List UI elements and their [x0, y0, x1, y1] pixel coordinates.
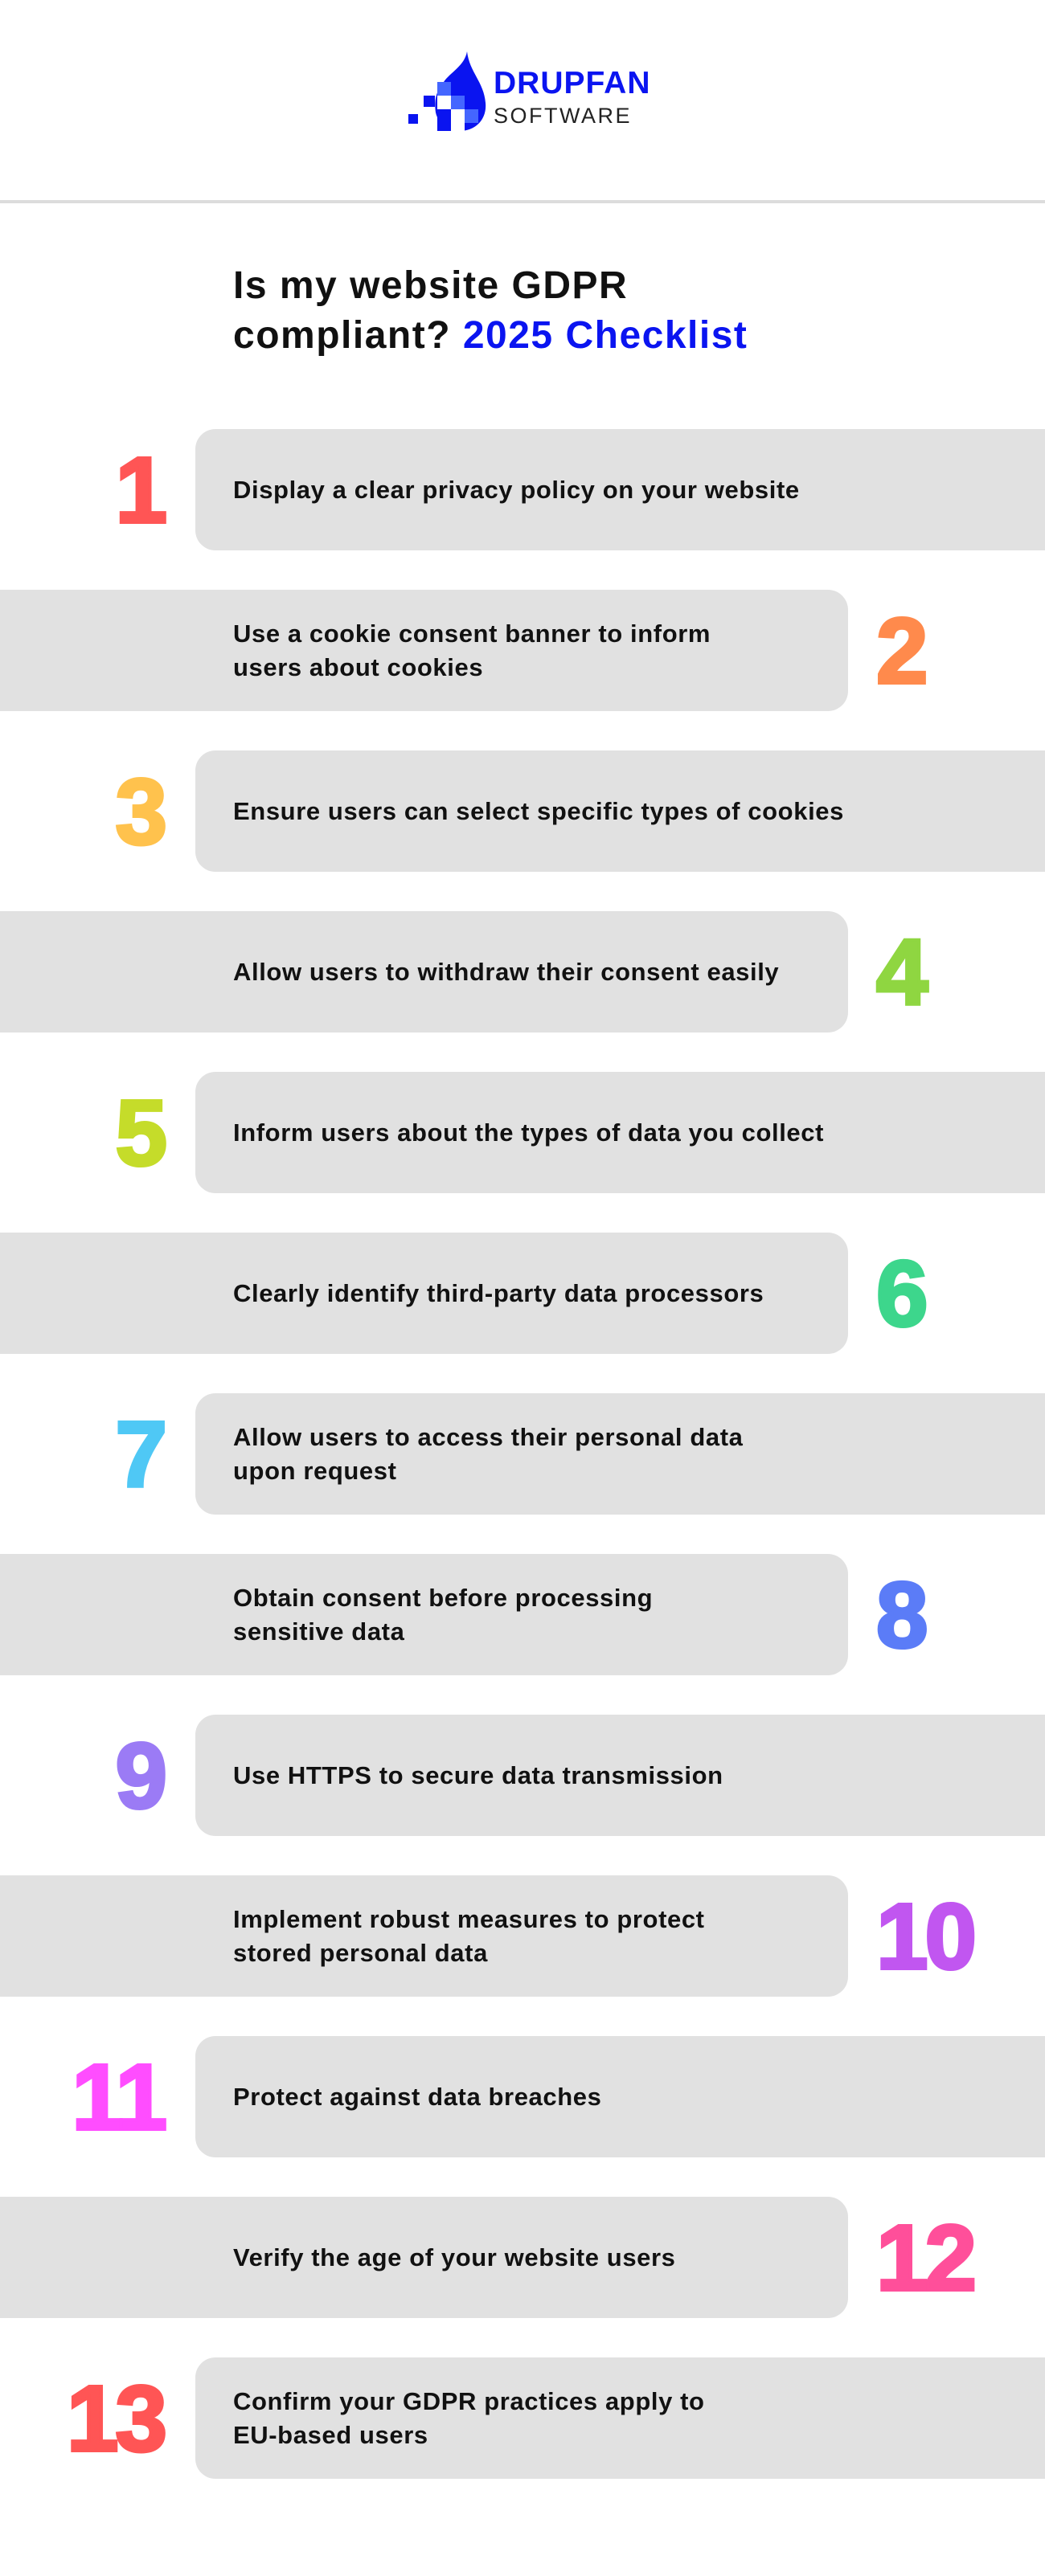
item 5: 5 [115, 1080, 164, 1184]
item 10: Implement robust measures to protect [233, 1904, 705, 1933]
logo [408, 51, 651, 131]
item 11: 11 [72, 2044, 164, 2149]
item 12 [0, 2197, 974, 2318]
item 8: 8 [876, 1562, 925, 1666]
item 9: 9 [115, 1723, 164, 1827]
item 4: 4 [876, 919, 925, 1024]
item 13: 13 [67, 2365, 164, 2470]
item 12: 12 [876, 2205, 973, 2309]
item 4 [0, 911, 929, 1032]
title: compliant? 2025 Checklist [233, 314, 748, 357]
item 5: Inform users about the types of data you collect [233, 1118, 824, 1146]
item 13: EU-based users [233, 2420, 428, 2449]
item 2: 2 [876, 598, 925, 702]
item 4: Allow users to withdraw their consent easily [233, 958, 779, 985]
item 1: 1 [115, 437, 164, 542]
item 12: Verify the age of your website users [233, 2243, 676, 2271]
item 8: sensitive data [233, 1617, 404, 1646]
item 10 [0, 1875, 974, 1997]
logo text: DRUPFAN [494, 66, 651, 100]
item 6 [0, 1233, 926, 1354]
item 10: 10 [876, 1883, 973, 1988]
title [233, 264, 748, 357]
item 7 [115, 1393, 1045, 1515]
item 7: 7 [115, 1401, 164, 1506]
icon: drop with pixels [408, 51, 486, 131]
item 9 [115, 1715, 1045, 1836]
item 1: Display a clear privacy policy on your website [233, 476, 800, 503]
item 11 [72, 2036, 1045, 2157]
item 10: stored personal data [233, 1938, 488, 1967]
item 2 [0, 590, 926, 711]
item 11: Protect against data breaches [233, 2083, 601, 2110]
item 2: users about cookies [233, 652, 483, 681]
item 13 [67, 2357, 1045, 2479]
item 6: Clearly identify third-party data processors [233, 1279, 764, 1306]
item 8 [0, 1554, 927, 1675]
item 1 [115, 429, 1045, 550]
item 6: 6 [876, 1241, 925, 1345]
item 3: 3 [115, 758, 164, 863]
item 8: Obtain consent before processing [233, 1583, 653, 1612]
item 7: upon request [233, 1456, 397, 1485]
item 3 [115, 750, 1045, 872]
logo: SOFTWARE [494, 104, 632, 128]
item 9: Use HTTPS to secure data transmission [233, 1761, 723, 1789]
item 3: Ensure users can select specific types of cookies [233, 797, 844, 824]
item 2: Use a cookie consent banner to inform [233, 619, 711, 648]
item 13: Confirm your GDPR practices apply to [233, 2386, 705, 2415]
item 7: Allow users to access their personal data [233, 1422, 743, 1451]
item 5 [115, 1072, 1045, 1193]
title: Is my website GDPR [233, 264, 628, 307]
